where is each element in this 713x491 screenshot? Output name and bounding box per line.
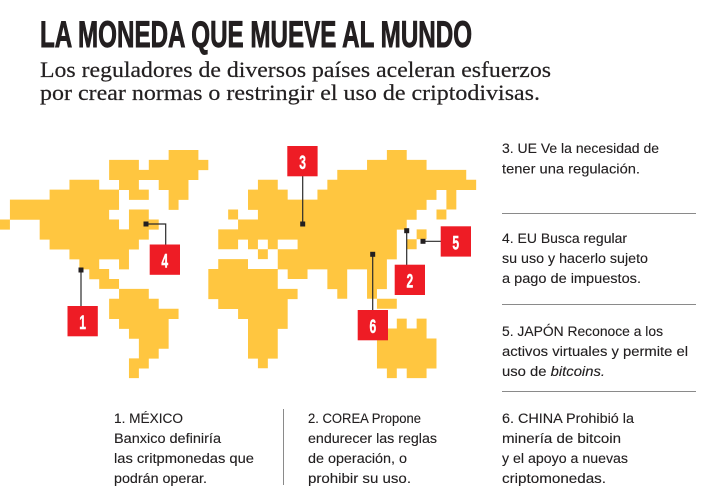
marker 4: EU: 4 [161,251,168,272]
marker 5: Japón: 5 [452,232,459,254]
text: 4. EU: a pago de impuestos. [502,271,641,287]
text: 4. EU: 4. EU Busca regular [502,231,627,247]
text: 2. Corea: 2. COREA Propone [308,411,421,427]
text: 6. China: 6. CHINA Prohibió la [502,411,634,427]
text: 5. Japón: uso de bitcoins. [502,364,605,380]
marker 6: China [358,252,388,340]
text: 4. EU [502,231,648,287]
map: Europe, Africa and Asia [208,150,476,368]
marker 2: Corea: 2 [407,271,413,293]
title: LA MONEDA QUE MUEVE AL MUNDO [40,14,472,55]
subtitle [40,57,551,105]
text: 2. Corea: endurecer las reglas [308,431,437,447]
text: 3. UE: 3. UE Ve la necesidad de [502,141,659,157]
marker 6: China: 6 [370,316,376,338]
text: 1. México: 1. MÉXICO [114,410,183,427]
marker 3: UE: 3 [299,152,306,174]
map: North America [0,150,208,289]
marker 3: UE [287,146,318,226]
pixel world map [0,150,476,378]
marker 5: Japón [420,226,471,257]
text: 3. UE [502,141,659,178]
text: 5. Japón: activos virtuales y permite el [502,344,688,360]
text: 2. Corea [308,411,437,487]
text: 5. Japón: 5. JAPÓN Reconoce a los [502,323,663,340]
text: 3. UE: tener una regulación. [502,162,640,178]
text: 5. Japón [502,323,688,380]
text: 6. China: minería de bitcoin [502,431,621,447]
text: 1. México [114,410,254,487]
subtitle: Los reguladores de diversos países aceleran esfuerzos [40,57,551,82]
marker 1: México [68,268,98,336]
text: 6. China: criptomonedas. [502,471,606,487]
marker 2: Corea [395,228,425,295]
text: 4. EU: su uso y hacerlo sujeto [502,251,648,267]
marker 4: EU [144,222,180,275]
map: South America [109,289,179,378]
text: 2. Corea: prohibir su uso. [308,471,411,487]
text: 6. China: y el apoyo a nuevas [502,451,628,467]
text: 6. China [502,411,634,487]
text: 1. México: las critpmonedas que [114,451,254,467]
marker 1: México: 1 [79,312,86,334]
text: 2. Corea: de operación, o [308,451,407,467]
text: 1. México: podrán operar. [114,471,207,487]
map: Australia [377,319,436,378]
subtitle: por crear normas o restringir el uso de criptodivisas. [40,80,540,105]
text: 1. México: Banxico definiría [114,431,221,447]
